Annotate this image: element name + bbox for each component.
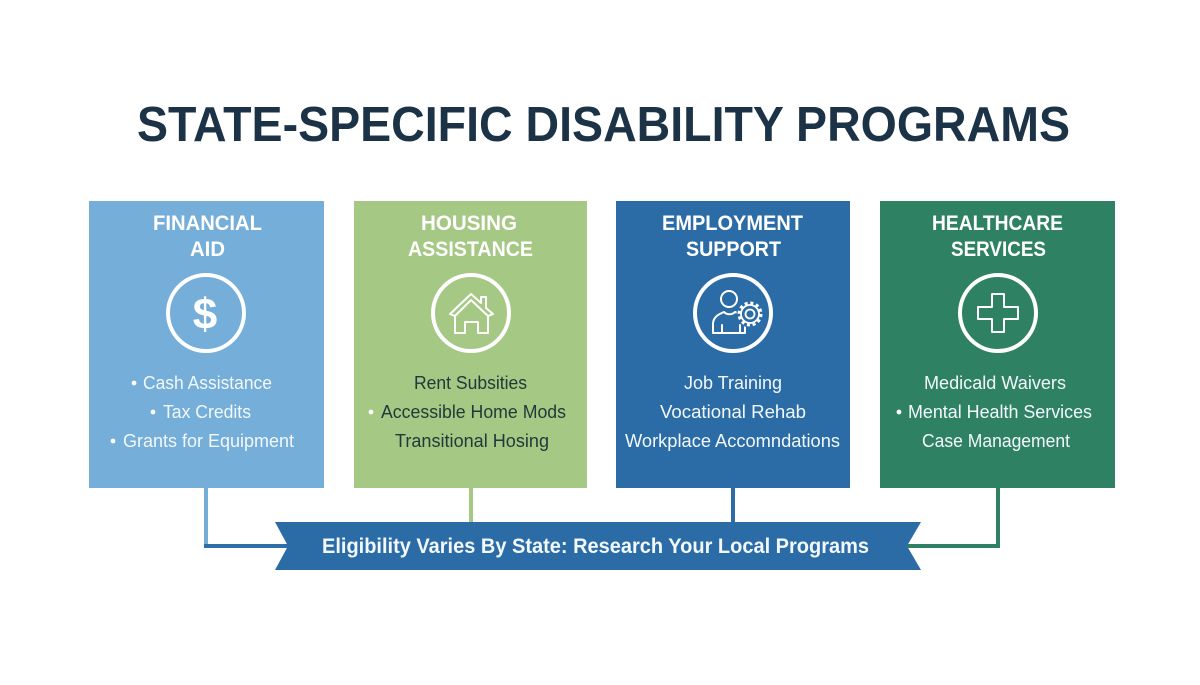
heading: housing assistance: ASSISTANCE xyxy=(408,238,533,261)
panel: healthcare services xyxy=(880,201,1115,488)
heading: financial aid xyxy=(153,212,262,261)
icon: dollar sign xyxy=(168,275,244,351)
connector: housing assistance to banner xyxy=(469,488,473,524)
heading: employment support: EMPLOYMENT xyxy=(662,212,803,235)
list: healthcare services items: Mental Health Services xyxy=(908,402,1092,422)
list: financial aid items xyxy=(111,373,294,451)
panel: employment support xyxy=(616,201,850,488)
list: financial aid items: Tax Credits xyxy=(163,402,251,422)
list: healthcare services items: Case Management xyxy=(922,431,1070,451)
heading: financial aid: AID xyxy=(190,238,225,261)
list: employment support items: Job Training xyxy=(684,373,782,393)
icon: dollar sign: $ xyxy=(193,290,217,339)
list: employment support items xyxy=(625,373,840,451)
icon: person with gear xyxy=(695,275,771,351)
list: healthcare services items xyxy=(897,373,1092,451)
connector: employment support to banner xyxy=(731,488,735,524)
list: housing assistance items: Transitional Hosing xyxy=(395,431,549,451)
icon: house xyxy=(433,275,509,351)
heading: housing assistance xyxy=(408,212,533,261)
connector: healthcare services to banner xyxy=(905,488,998,546)
list: housing assistance items: Rent Subsities xyxy=(414,373,527,393)
banner: eligibility note xyxy=(275,522,921,570)
title: STATE-SPECIFIC DISABILITY PROGRAMS xyxy=(137,98,1070,152)
icon: medical cross xyxy=(960,275,1036,351)
heading: healthcare services: HEALTHCARE xyxy=(932,212,1063,235)
list: financial aid items: Grants for Equipment xyxy=(123,431,294,451)
banner: eligibility note: Eligibility Varies By State: Research Your Local Programs xyxy=(322,535,869,558)
panel: financial aid xyxy=(89,201,324,488)
list: housing assistance items xyxy=(369,373,566,451)
panel: housing assistance xyxy=(354,201,587,488)
heading: healthcare services: SERVICES xyxy=(951,238,1046,261)
list: employment support items: Workplace Accomndations xyxy=(625,431,840,451)
heading: financial aid: FINANCIAL xyxy=(153,212,262,235)
list: housing assistance items: Accessible Home Mods xyxy=(381,402,566,422)
heading: healthcare services xyxy=(932,212,1063,261)
list: employment support items: Vocational Rehab xyxy=(660,402,806,422)
connector: financial aid to banner xyxy=(204,488,290,546)
list: financial aid items: Cash Assistance xyxy=(143,373,272,393)
heading: employment support: SUPPORT xyxy=(686,238,781,261)
heading: employment support xyxy=(662,212,803,261)
list: healthcare services items: Medicald Waivers xyxy=(924,373,1066,393)
heading: housing assistance: HOUSING xyxy=(421,212,517,235)
